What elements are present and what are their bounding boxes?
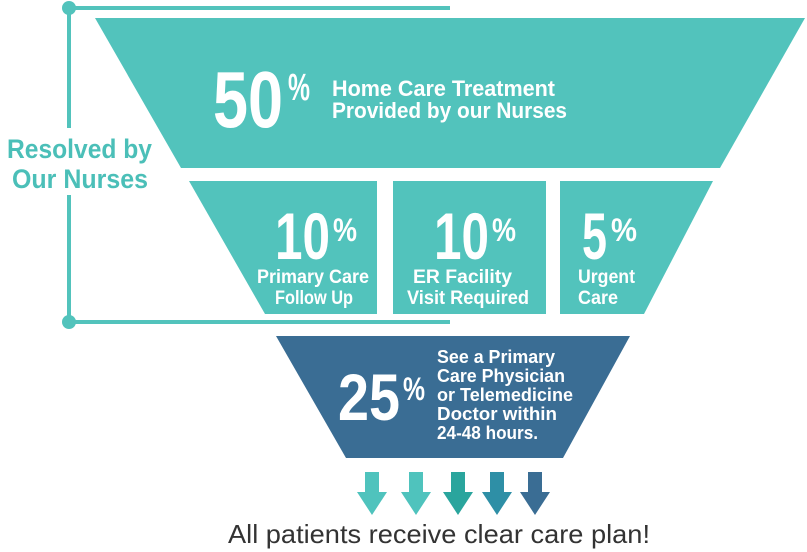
panel: 10% ER (393, 181, 546, 314)
panel: 10% primary care: % (333, 212, 357, 248)
panel: 25% physician: See a Primary (437, 347, 555, 367)
panel: 10% ER: Visit Required (407, 288, 529, 309)
bracket: resolved by our nurses (62, 1, 450, 329)
panel: 10% primary care: 10 (275, 199, 330, 273)
panel: 10% primary care: Primary Care (257, 267, 369, 288)
panel: 10% ER: ER Facility (413, 267, 512, 288)
panel: 10% primary care (189, 181, 377, 314)
label: resolved by our nurses: Our Nurses (12, 164, 148, 194)
panel: 25% physician: Care Physician (437, 366, 565, 386)
panel: 50% home care: % (288, 67, 310, 109)
panel: 5% urgent care (560, 181, 713, 314)
panel: 10% ER: % (492, 212, 516, 248)
panel: 5% urgent care: % (611, 212, 637, 248)
panel: 5% urgent care: Urgent (578, 267, 636, 288)
footer text: All patients receive clear care plan! (228, 519, 650, 549)
panel: 25% physician: or Telemedicine (437, 385, 573, 405)
panel: 25% physician: % (403, 371, 425, 407)
panel: 10% primary care: Follow Up (275, 288, 353, 309)
panel: 25% physician: 25 (338, 360, 400, 434)
panel: 5% urgent care: 5 (582, 199, 607, 273)
panel: 25% physician: 24-48 hours. (437, 423, 538, 443)
panel: 5% urgent care: Care (578, 288, 618, 309)
panel: 50% home care (95, 18, 805, 168)
label: resolved by our nurses: Resolved by (7, 134, 152, 164)
arrows (357, 472, 550, 515)
panel: 25% physician (276, 336, 630, 458)
panel: 50% home care: 50 (213, 55, 283, 144)
panel: 50% home care: Home Care Treatment (332, 76, 556, 101)
label: resolved by our nurses (7, 134, 152, 194)
panel: 10% ER: 10 (434, 199, 489, 273)
panel: 25% physician: Doctor within (437, 404, 557, 424)
panel: 50% home care: Provided by our Nurses (332, 98, 567, 123)
